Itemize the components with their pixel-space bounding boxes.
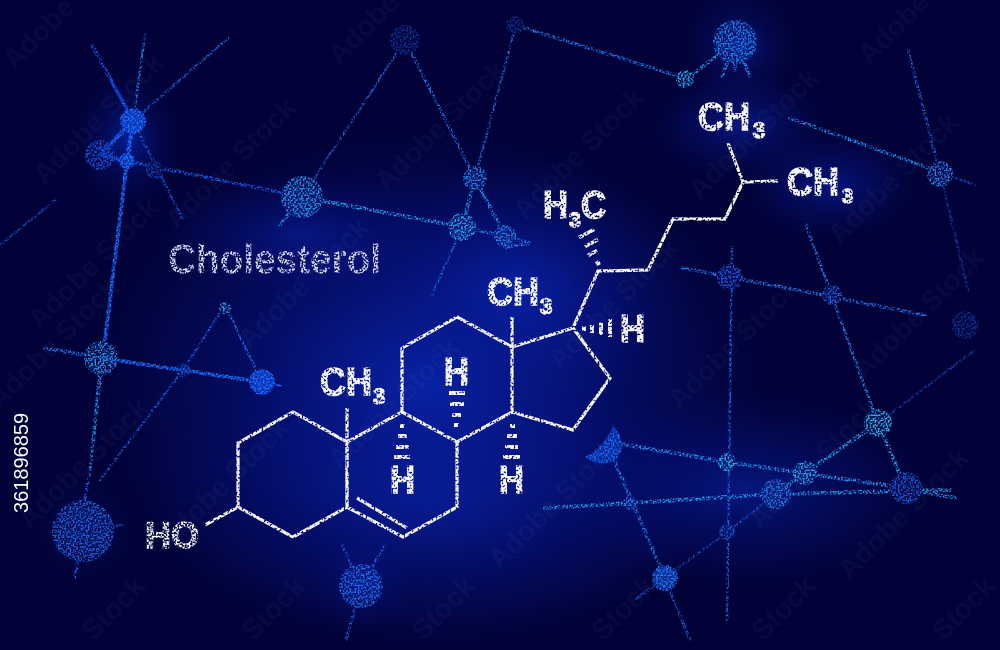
watermarks: Adobe Stock <box>369 54 512 197</box>
cholesterol molecule structure <box>205 143 778 537</box>
H labels <box>390 308 645 502</box>
side chain <box>573 143 778 328</box>
network: solid bright underlay <box>100 80 677 590</box>
watermarks: Stock <box>75 570 152 646</box>
watermarks: Adobe Stock <box>22 192 165 335</box>
double bond <box>357 498 407 528</box>
CH3 label top right: CH <box>698 96 750 139</box>
watermarks: Stock <box>235 570 312 646</box>
CH3 label near ring A: CH <box>320 361 372 404</box>
methyl bonds <box>347 317 512 442</box>
watermarks: Stock <box>585 570 662 646</box>
watermarks: Adobe Stock <box>742 392 885 535</box>
CH3 label right: 3 <box>842 186 853 208</box>
network: bottom node <box>339 545 385 640</box>
H labels: H <box>620 308 645 351</box>
stock id: 361896859 <box>11 413 33 513</box>
H labels: H <box>499 459 524 502</box>
watermarks: Stock <box>745 570 822 646</box>
CH3 label above ring C: CH <box>487 271 539 314</box>
H3C label: 3 <box>569 209 581 232</box>
network: top right node <box>676 20 757 88</box>
network: left middle cluster <box>45 302 280 480</box>
network: lower left large node <box>52 470 122 578</box>
ring C <box>402 317 512 442</box>
watermarks: Adobe Stock <box>159 92 302 235</box>
network: upper left cluster <box>0 35 302 470</box>
HO label: HO <box>145 515 199 556</box>
watermarks: Adobe Stock <box>12 392 155 535</box>
watermarks: Adobe Stock <box>847 242 990 385</box>
watermarks: Adobe Stock <box>507 82 650 225</box>
watermarks: Stock <box>405 570 482 646</box>
ring A <box>238 412 347 537</box>
H3C label <box>543 184 606 232</box>
network: lower right cluster <box>545 225 979 640</box>
watermarks: Adobe Stock <box>27 47 170 190</box>
ring D <box>512 328 610 430</box>
network: far right node <box>790 50 975 290</box>
watermarks: Adobe Stock <box>662 272 805 415</box>
CH3 label near ring A: 3 <box>373 384 385 409</box>
hash bonds <box>394 228 612 459</box>
H3C label: C <box>581 184 606 227</box>
watermarks: Adobe Stock <box>832 442 975 585</box>
watermarks: Adobe Stock <box>322 332 465 475</box>
ring B <box>347 412 457 537</box>
CH3 label top right: 3 <box>753 118 765 143</box>
watermarks: Adobe Stock <box>682 62 825 205</box>
watermarks: Adobe Stock <box>482 432 625 575</box>
watermarks: Stock <box>925 570 1000 646</box>
watermarks: Adobe Stock <box>152 412 295 555</box>
watermarks: Adobe Stock <box>822 107 965 250</box>
H3C label: H <box>543 184 568 227</box>
title: Cholesterol: Cholesterol <box>168 236 381 282</box>
hydroxyl bond <box>205 507 238 525</box>
watermarks: Adobe Stock <box>232 212 375 355</box>
H labels: H <box>390 459 415 502</box>
watermarks: Adobe Stock <box>542 232 685 375</box>
H labels: H <box>444 351 469 394</box>
CH3 label above ring C: 3 <box>540 294 552 319</box>
network: upper centre cluster <box>280 16 685 295</box>
CH3 label right: CH <box>787 161 839 204</box>
